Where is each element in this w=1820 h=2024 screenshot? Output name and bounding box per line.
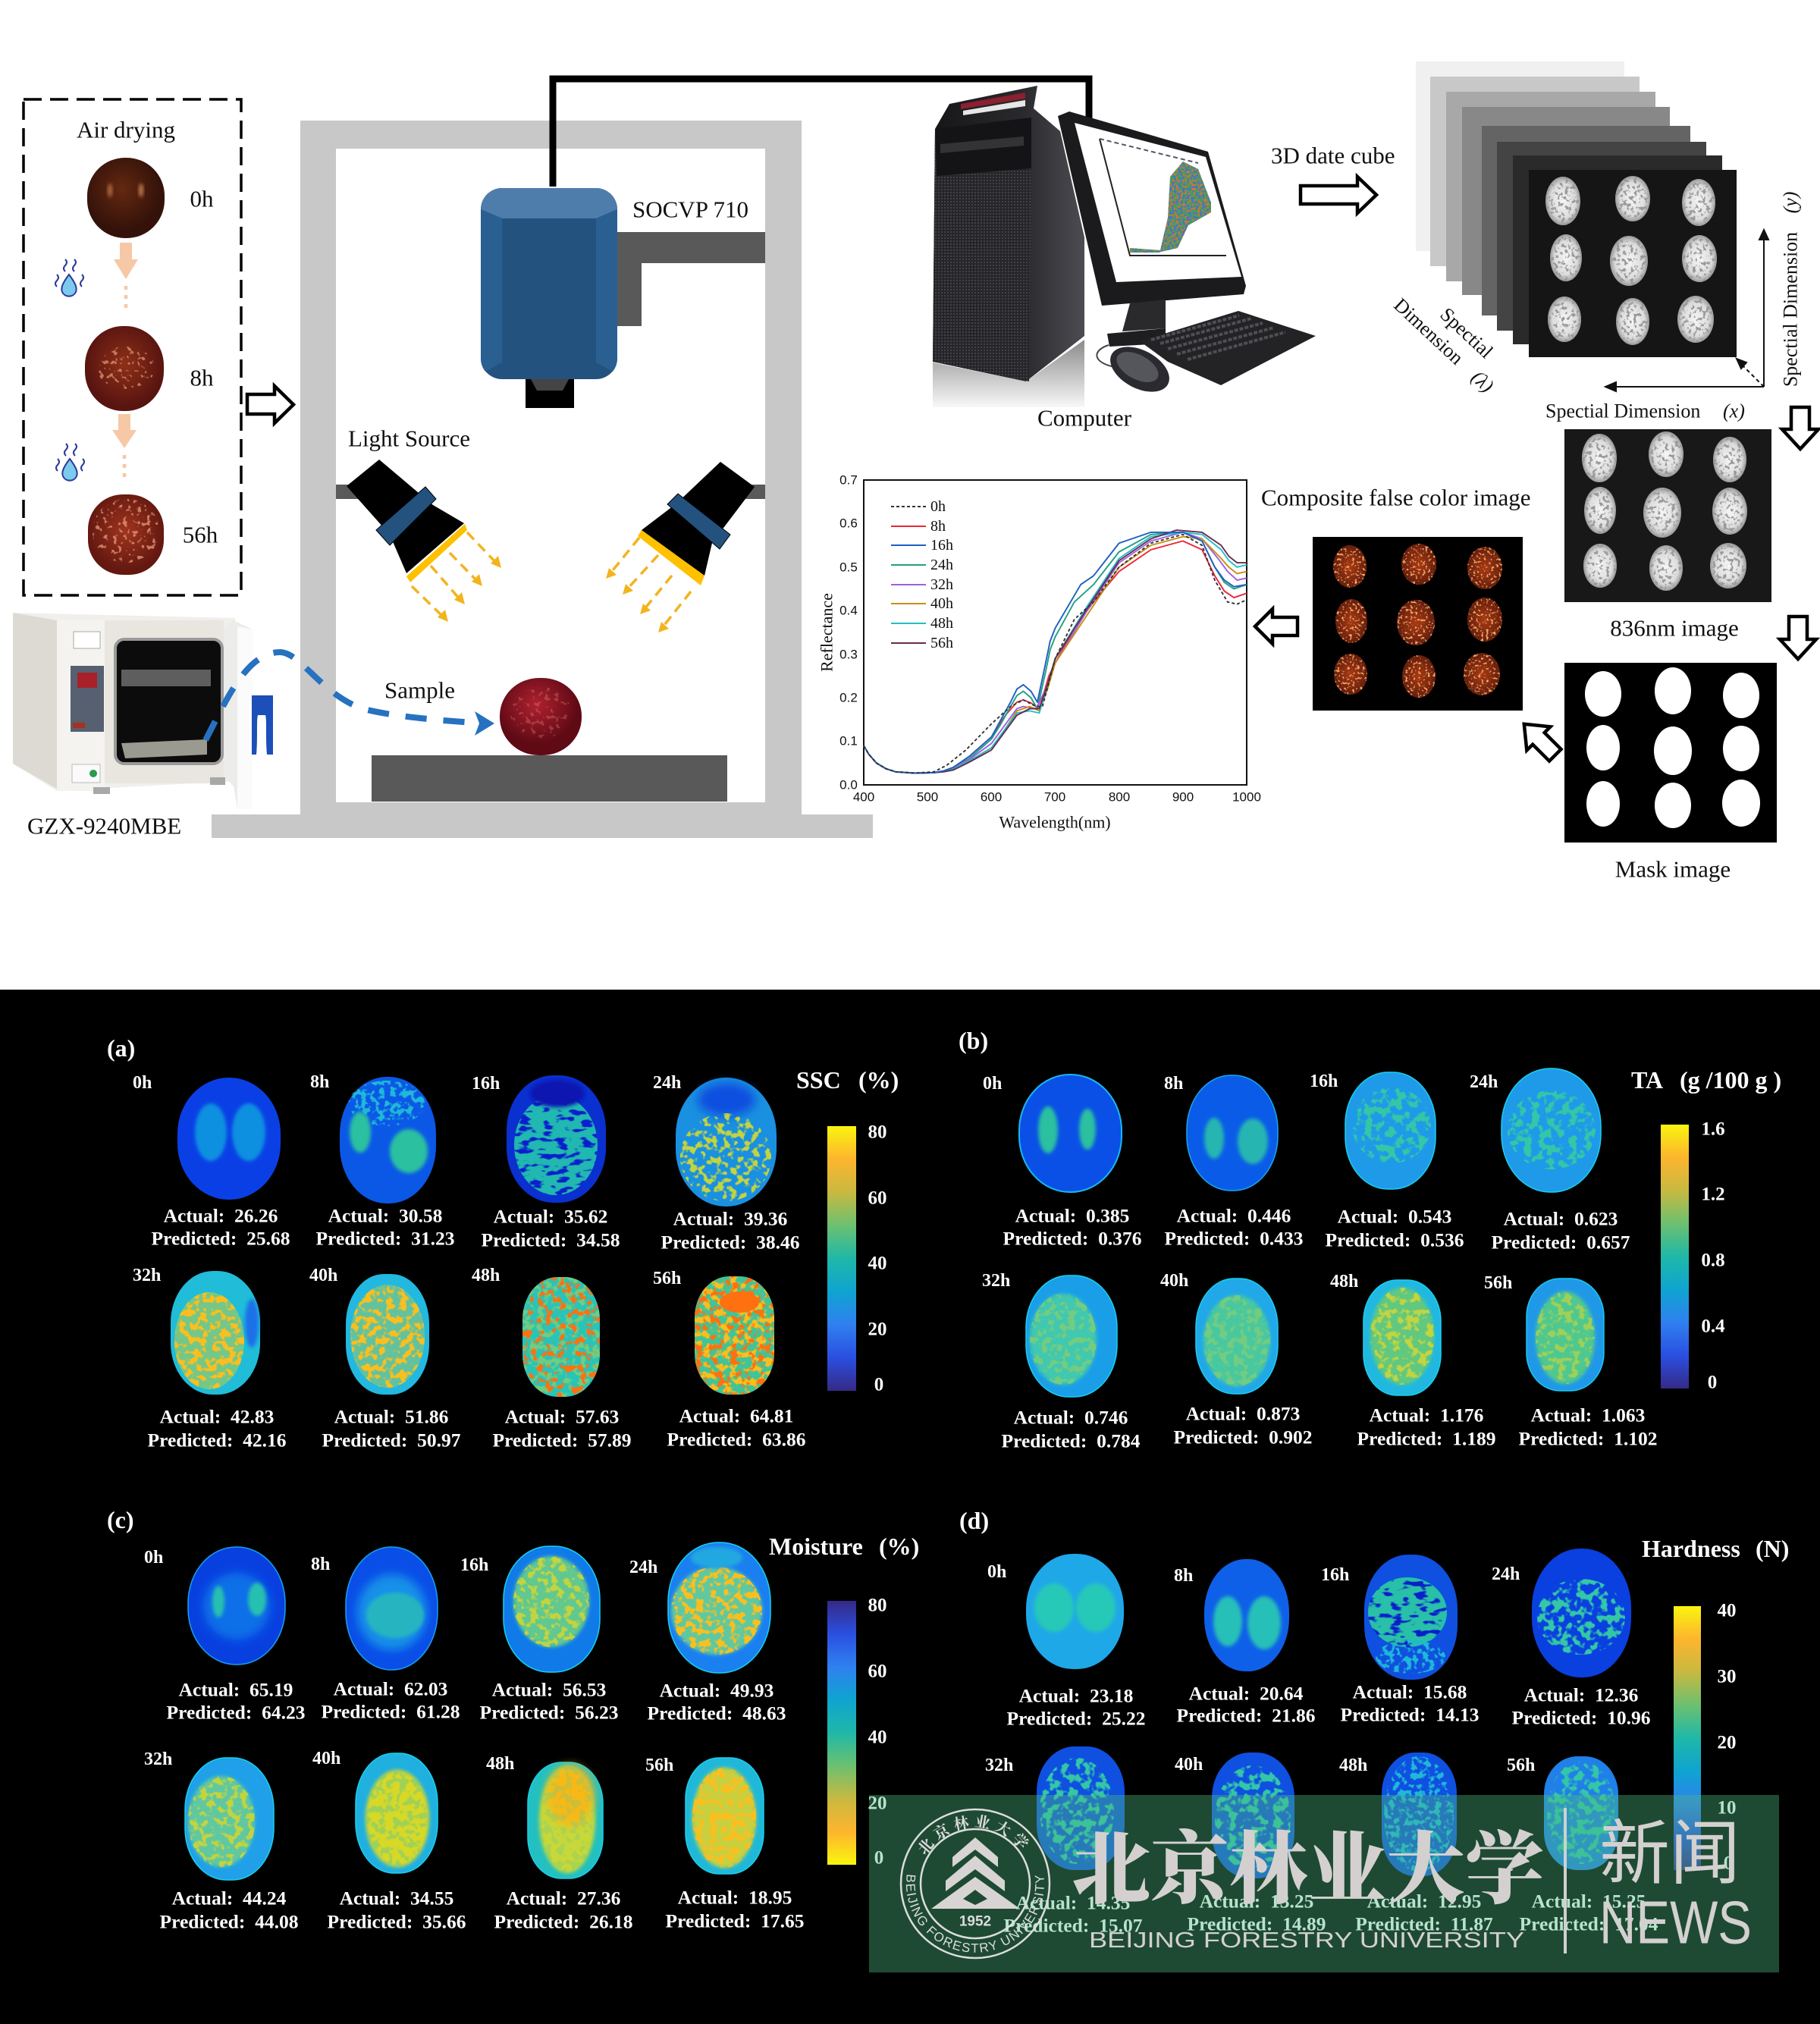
heatmap 56h: 56h	[645, 1756, 673, 1775]
values 56h	[667, 1404, 805, 1450]
legend: 16h	[930, 537, 953, 554]
tick labels: 0.2	[839, 690, 858, 705]
colour bar ticks	[1717, 1600, 1737, 1873]
values 24h: Predicted: 0.657	[1492, 1232, 1630, 1253]
colour bar ticks: 60	[868, 1661, 887, 1682]
panel: imaging chamber frame	[212, 121, 873, 838]
axis title y: Reflectance	[817, 593, 836, 672]
values 32h	[160, 1887, 298, 1932]
tick labels: 0.4	[839, 604, 858, 617]
values 48h: Actual: 27.36	[507, 1887, 620, 1909]
heatmap 24h: 24h	[653, 1073, 681, 1093]
colour bar ticks: 1.6	[1701, 1119, 1725, 1139]
values 48h	[1355, 1890, 1493, 1935]
values 32h: Actual: 14.35	[1016, 1891, 1130, 1914]
arrow: down	[1782, 407, 1818, 449]
heatmap 48h: 48h	[1339, 1756, 1367, 1775]
axis title x: Wavelength(nm)	[999, 813, 1111, 831]
icon: right lamp	[606, 462, 755, 632]
values 0h: Predicted: 25.68	[152, 1227, 290, 1250]
heatmap 8h: 8h	[310, 1072, 329, 1092]
heatmap 48h	[1330, 1272, 1441, 1395]
tick labels: 700	[1044, 790, 1065, 804]
spectral curves	[864, 530, 1247, 773]
panel b: TA	[959, 1027, 1781, 1451]
watermark banner: Beijing Forestry University news	[869, 1795, 1779, 1972]
line chart: reflectance vs wavelength	[817, 473, 1261, 831]
label: composite false colour: Composite false color image	[1261, 484, 1531, 511]
values 24h	[1512, 1684, 1650, 1729]
colour bar ticks	[868, 1122, 887, 1395]
values 48h	[493, 1406, 631, 1451]
heatmap 16h	[1321, 1555, 1458, 1680]
values 16h: Actual: 35.62	[494, 1206, 607, 1227]
heatmap 56h: 56h	[1484, 1273, 1512, 1293]
colour bar ticks: 1.2	[1701, 1185, 1725, 1204]
icon: water evaporation	[55, 259, 83, 297]
sample stage	[372, 755, 727, 802]
heading: Moisture	[769, 1533, 863, 1560]
tick labels: 0.3	[839, 648, 858, 661]
values 48h: Actual: 1.176	[1370, 1404, 1483, 1426]
label: spectral dimension y: Spectial Dimension	[1779, 232, 1802, 387]
heatmap 40h: 40h	[1160, 1271, 1188, 1291]
panel label: (b)	[959, 1027, 988, 1054]
hyperspectral data cube stack	[1416, 61, 1737, 357]
heatmap 16h	[1310, 1072, 1436, 1189]
values 16h	[1341, 1680, 1479, 1726]
heatmap 16h: 16h	[460, 1555, 488, 1575]
colour bar ticks: 80	[868, 1596, 887, 1615]
heatmap 32h: 32h	[144, 1749, 172, 1769]
arrow	[112, 414, 136, 481]
values 40h: Predicted: 35.66	[328, 1911, 466, 1932]
values 8h: Actual: 62.03	[334, 1677, 447, 1700]
values 56h: Predicted: 63.86	[667, 1429, 805, 1450]
heatmap 40h: 40h	[309, 1266, 337, 1285]
jujube sample	[500, 678, 582, 755]
values 0h: Actual: 65.19	[179, 1679, 293, 1700]
heading: (%)	[858, 1066, 899, 1094]
values 32h	[1002, 1406, 1141, 1451]
heatmap 24h: 24h	[1470, 1072, 1498, 1092]
colour bar ticks: 0	[1724, 1853, 1733, 1873]
values 56h: Predicted: 17.04	[1520, 1913, 1658, 1935]
values 0h: Predicted: 25.22	[1007, 1708, 1145, 1729]
values 32h: Predicted: 0.784	[1002, 1430, 1141, 1451]
mask image	[1564, 663, 1777, 843]
values 0h: Actual: 0.385	[1015, 1204, 1129, 1227]
colour bar ticks: 0	[874, 1374, 883, 1395]
jujube 0h	[87, 158, 165, 238]
values 24h: Actual: 49.93	[660, 1679, 774, 1702]
colour bar ticks: 80	[868, 1122, 887, 1142]
colour bar ticks: 0.4	[1701, 1316, 1725, 1336]
heatmap 32h: 32h	[133, 1266, 161, 1285]
heatmap 24h	[1470, 1068, 1601, 1192]
heading: air drying: Air drying	[77, 117, 175, 143]
colour bar ticks: 40	[868, 1727, 887, 1747]
divider	[1564, 1808, 1567, 1953]
heatmap 32h	[982, 1271, 1117, 1397]
heatmap 48h	[472, 1266, 600, 1397]
values 40h	[328, 1887, 466, 1932]
values 40h: Actual: 34.55	[340, 1887, 453, 1909]
logo: university seal: 1952	[959, 1914, 991, 1929]
arrow: to composite	[1512, 712, 1567, 767]
values 56h	[666, 1887, 804, 1932]
heatmap 24h	[1492, 1549, 1631, 1677]
values 8h: Predicted: 0.433	[1165, 1227, 1303, 1250]
heatmap 16h	[472, 1074, 606, 1203]
values 16h: Predicted: 34.58	[482, 1229, 620, 1251]
heatmap 8h: 8h	[1164, 1074, 1183, 1094]
wordmark: Chinese university name: 北京林业大学	[1072, 1806, 1544, 1919]
heatmap 40h	[1160, 1271, 1278, 1394]
values 16h	[480, 1679, 618, 1723]
values 56h	[1520, 1890, 1658, 1935]
tick labels: 0.1	[839, 734, 858, 748]
tick labels: 0.7	[839, 473, 858, 487]
heatmap 8h: 8h	[311, 1555, 330, 1574]
values 8h	[316, 1204, 454, 1250]
panel d: Hardness	[959, 1507, 1789, 1937]
values 16h	[1326, 1206, 1464, 1251]
computer	[933, 86, 1316, 407]
legend: 32h	[930, 576, 953, 593]
colour bar ticks: 30	[1717, 1667, 1737, 1687]
colour bar ticks: 20	[868, 1793, 887, 1814]
background: white upper section	[0, 0, 1820, 990]
values 48h: Actual: 12.95	[1367, 1890, 1481, 1913]
values 0h	[152, 1204, 290, 1250]
values 24h	[648, 1679, 786, 1724]
colour bar ticks: 10	[1717, 1797, 1737, 1818]
heatmap 24h	[629, 1542, 770, 1673]
values 40h	[322, 1406, 461, 1451]
values 0h: Actual: 23.18	[1019, 1685, 1133, 1706]
heatmap 40h	[312, 1749, 438, 1873]
label: sample: Sample	[384, 676, 455, 704]
colour bar	[1674, 1606, 1701, 1870]
jujube 56h	[88, 494, 164, 575]
panel a: SSC	[107, 1034, 899, 1451]
heading: (%)	[879, 1533, 919, 1560]
axis arrows	[1605, 230, 1768, 391]
arrow: to chamber	[247, 386, 293, 423]
label 0h: 0h	[190, 185, 214, 212]
values 16h: Predicted: 0.536	[1326, 1229, 1464, 1251]
arrow: dashed oven to sample	[206, 652, 494, 740]
heatmap 8h	[310, 1072, 436, 1203]
colour bar	[1661, 1125, 1689, 1389]
legend: 56h	[930, 635, 953, 651]
values 24h: Predicted: 48.63	[648, 1702, 786, 1724]
values 8h	[1165, 1204, 1303, 1250]
values 24h: Predicted: 10.96	[1512, 1706, 1650, 1729]
values 48h: Predicted: 26.18	[494, 1911, 632, 1932]
heatmap 24h: 24h	[1492, 1564, 1520, 1584]
camera mounting arm	[617, 232, 765, 326]
values 16h: Actual: 15.68	[1353, 1680, 1467, 1703]
heatmap 32h	[133, 1266, 260, 1395]
values 16h: Predicted: 14.13	[1341, 1703, 1479, 1726]
label: spectral dimension x: (x)	[1723, 400, 1745, 422]
heatmap 32h: 32h	[982, 1271, 1010, 1291]
values 24h	[661, 1207, 799, 1253]
values 16h	[482, 1206, 620, 1251]
values 32h: Actual: 44.24	[172, 1887, 287, 1909]
label: SOCVP 710: SOCVP 710	[632, 196, 748, 223]
heatmap 32h	[985, 1746, 1125, 1870]
heatmap 0h: 0h	[987, 1562, 1006, 1582]
tick labels: 0.0	[839, 778, 858, 792]
colour bar ticks: 0	[874, 1847, 883, 1869]
arrow: to data cube	[1301, 177, 1376, 213]
heatmap 56h	[653, 1269, 774, 1395]
values 16h: Actual: 56.53	[492, 1679, 606, 1700]
heatmap 0h	[133, 1073, 281, 1200]
heatmap 0h	[987, 1554, 1124, 1669]
values 40h	[1174, 1403, 1312, 1448]
label: spectral dimension lambda: (λ)	[1467, 366, 1498, 397]
label: spectral dimension lambda: Spectial	[1436, 303, 1498, 362]
colour bar ticks: 20	[1717, 1732, 1737, 1753]
heatmap 32h: 32h	[985, 1756, 1013, 1775]
values 32h: Actual: 42.83	[160, 1406, 274, 1427]
values 8h	[322, 1677, 460, 1723]
heatmap 56h	[1484, 1273, 1604, 1391]
label: computer: Computer	[1037, 405, 1132, 431]
heatmap 48h	[1339, 1753, 1457, 1876]
values 56h	[1519, 1404, 1657, 1450]
values 32h	[148, 1406, 286, 1451]
icon: water evaporation	[56, 444, 84, 481]
heatmap 8h	[1164, 1074, 1278, 1191]
values 40h: Predicted: 50.97	[322, 1429, 461, 1451]
values 40h: Actual: 0.873	[1186, 1403, 1300, 1424]
tick labels: 400	[853, 790, 874, 804]
heatmap 16h	[460, 1546, 600, 1672]
heatmap 56h	[1507, 1756, 1618, 1870]
label: oven model: GZX-9240MBE	[27, 813, 181, 839]
heatmap 0h: 0h	[144, 1548, 163, 1567]
values 40h: Predicted: 0.902	[1174, 1426, 1312, 1448]
arrow: to chart	[1255, 609, 1298, 644]
arrow: down	[1780, 617, 1816, 659]
panel label: (d)	[959, 1507, 989, 1534]
heatmap 40h	[309, 1266, 429, 1395]
tick labels: 600	[981, 790, 1002, 804]
values 0h	[1003, 1204, 1141, 1250]
light mount bars	[336, 485, 765, 499]
colour bar ticks: 60	[868, 1188, 887, 1209]
values 16h: Actual: 0.543	[1338, 1206, 1451, 1227]
logo: university seal: 北京林业大学	[918, 1814, 1029, 1855]
colour bar ticks	[868, 1596, 887, 1869]
tick labels	[839, 473, 1261, 804]
heatmap 24h	[653, 1073, 777, 1207]
logo: university seal: BEIJING FORESTRY UNIVERSITY	[905, 1875, 1044, 1953]
values 48h	[494, 1887, 632, 1932]
colour bar	[827, 1126, 856, 1391]
values 24h	[1492, 1207, 1630, 1253]
values 24h: Predicted: 38.46	[661, 1232, 799, 1253]
colour bar ticks: 0.8	[1701, 1250, 1725, 1271]
values 0h	[1007, 1685, 1145, 1729]
label: spectral dimension lambda	[1389, 293, 1498, 397]
tick labels: 0.5	[839, 560, 858, 575]
heatmap 8h: 8h	[1174, 1566, 1193, 1586]
heatmap 56h	[645, 1756, 764, 1874]
heading: (N)	[1756, 1535, 1789, 1562]
values 40h: Actual: 51.86	[334, 1406, 448, 1427]
label: spectral dimension y: (y)	[1779, 192, 1802, 213]
legend	[891, 498, 953, 651]
heatmap 8h	[1174, 1559, 1289, 1671]
values 48h: Actual: 57.63	[505, 1406, 619, 1427]
values 48h: Predicted: 11.87	[1355, 1913, 1493, 1935]
heading: TA	[1631, 1066, 1663, 1094]
heatmap 48h	[486, 1754, 603, 1878]
panel c: Moisture	[107, 1506, 919, 1932]
heading: SSC	[796, 1066, 841, 1094]
background: black lower section	[0, 990, 1820, 2024]
values 24h: Actual: 0.623	[1504, 1207, 1618, 1230]
836nm image	[1564, 429, 1771, 602]
label: mask image: Mask image	[1615, 855, 1731, 883]
tick labels: 1000	[1232, 790, 1261, 804]
values 8h: Actual: 20.64	[1189, 1682, 1304, 1705]
values 32h: Predicted: 44.08	[160, 1911, 298, 1932]
heatmap 48h: 48h	[472, 1266, 500, 1285]
values 8h: Predicted: 31.23	[316, 1227, 454, 1250]
logo: university seal	[899, 1808, 1051, 1960]
colour bar ticks	[1701, 1119, 1725, 1392]
heatmap 56h: 56h	[653, 1269, 681, 1288]
values 40h	[1188, 1890, 1326, 1935]
label: 836nm image: 836nm image	[1610, 614, 1739, 642]
values 56h: Predicted: 1.102	[1519, 1427, 1657, 1450]
heatmap 0h	[983, 1074, 1122, 1192]
values 48h	[1357, 1404, 1495, 1450]
heatmap 16h: 16h	[1310, 1072, 1338, 1091]
heatmap 16h: 16h	[1321, 1565, 1349, 1585]
values 40h: Predicted: 14.89	[1188, 1913, 1326, 1935]
panel label: (c)	[107, 1506, 134, 1533]
heading: (g /100 g )	[1680, 1066, 1781, 1094]
heatmap 32h	[144, 1749, 274, 1880]
label: news English: NEWS	[1599, 1888, 1752, 1957]
values 8h: Predicted: 61.28	[322, 1700, 460, 1723]
wordmark: English university name: BEIJING FORESTRY UNIVERSITY	[1089, 1928, 1524, 1953]
label 56h: 56h	[183, 522, 218, 548]
values 8h: Actual: 30.58	[328, 1204, 442, 1227]
values 24h: Actual: 39.36	[673, 1207, 787, 1230]
colour bar ticks: 40	[1717, 1600, 1737, 1621]
values 0h: Actual: 26.26	[164, 1204, 278, 1227]
values 48h: Predicted: 1.189	[1357, 1427, 1495, 1450]
heatmap 0h	[144, 1547, 285, 1665]
heatmap 16h: 16h	[472, 1074, 500, 1094]
label: spectral dimension lambda: Dimension	[1389, 293, 1468, 369]
heatmap 24h: 24h	[629, 1558, 657, 1577]
colour bar ticks: 40	[868, 1253, 887, 1274]
heatmap 40h	[1175, 1753, 1294, 1878]
values 32h: Predicted: 15.07	[1004, 1914, 1143, 1937]
heatmap 56h: 56h	[1507, 1756, 1535, 1775]
values 56h: Actual: 1.063	[1531, 1404, 1645, 1426]
values 0h	[167, 1679, 305, 1723]
values 0h: Predicted: 64.23	[167, 1702, 305, 1723]
values 8h	[1177, 1682, 1315, 1726]
legend: 0h	[930, 498, 946, 515]
colour bar	[827, 1601, 856, 1865]
tick labels: 500	[917, 790, 938, 804]
legend: 48h	[930, 615, 953, 632]
values 32h: Predicted: 42.16	[148, 1429, 286, 1451]
values 16h: Predicted: 56.23	[480, 1702, 618, 1723]
label: 3D data cube: 3D date cube	[1271, 143, 1395, 168]
heatmap 0h: 0h	[133, 1073, 152, 1093]
label 8h: 8h	[190, 364, 214, 391]
jujube 8h	[85, 326, 164, 411]
heatmap 8h	[311, 1547, 438, 1670]
tick labels: 0.6	[839, 516, 858, 531]
heatmap 40h: 40h	[1175, 1755, 1203, 1775]
values 32h: Actual: 0.746	[1014, 1406, 1128, 1429]
label: news Chinese: 新闻	[1599, 1796, 1740, 1899]
legend: 40h	[930, 595, 953, 612]
values 24h: Actual: 12.36	[1524, 1684, 1638, 1706]
colour bar ticks: 20	[868, 1320, 887, 1339]
composite false colour image	[1313, 537, 1523, 711]
label: spectral dimension x: Spectial Dimension	[1545, 400, 1700, 422]
values 56h: Actual: 15.25	[1532, 1890, 1646, 1913]
icon: left lamp	[347, 460, 501, 622]
tick labels: 900	[1172, 790, 1194, 804]
icon: camera SOCVP 710	[481, 188, 617, 408]
values 0h: Predicted: 0.376	[1003, 1227, 1141, 1250]
values 32h	[1004, 1891, 1143, 1937]
heatmap 48h: 48h	[1330, 1272, 1358, 1291]
heatmap 40h: 40h	[312, 1749, 340, 1768]
values 40h: Actual: 13.25	[1200, 1890, 1313, 1913]
values 56h: Predicted: 17.65	[666, 1909, 804, 1932]
legend: 8h	[930, 518, 946, 535]
drying oven	[13, 613, 273, 809]
panel label: (a)	[107, 1034, 135, 1062]
cable from camera to computer	[553, 79, 1089, 187]
values 8h: Predicted: 21.86	[1177, 1705, 1315, 1726]
values 48h: Predicted: 57.89	[493, 1429, 631, 1451]
legend: 24h	[930, 557, 953, 573]
heatmap 0h: 0h	[983, 1074, 1002, 1094]
tick labels: 800	[1109, 790, 1130, 804]
values 8h: Actual: 0.446	[1177, 1204, 1291, 1227]
colour bar ticks: 0	[1708, 1373, 1717, 1392]
panel: air drying	[24, 99, 241, 595]
arrow	[114, 243, 138, 312]
label: light source: Light Source	[348, 425, 470, 452]
values 56h: Actual: 18.95	[678, 1887, 792, 1908]
heading: Hardness	[1642, 1535, 1740, 1562]
heatmap 48h: 48h	[486, 1754, 514, 1774]
values 56h: Actual: 64.81	[679, 1404, 793, 1427]
